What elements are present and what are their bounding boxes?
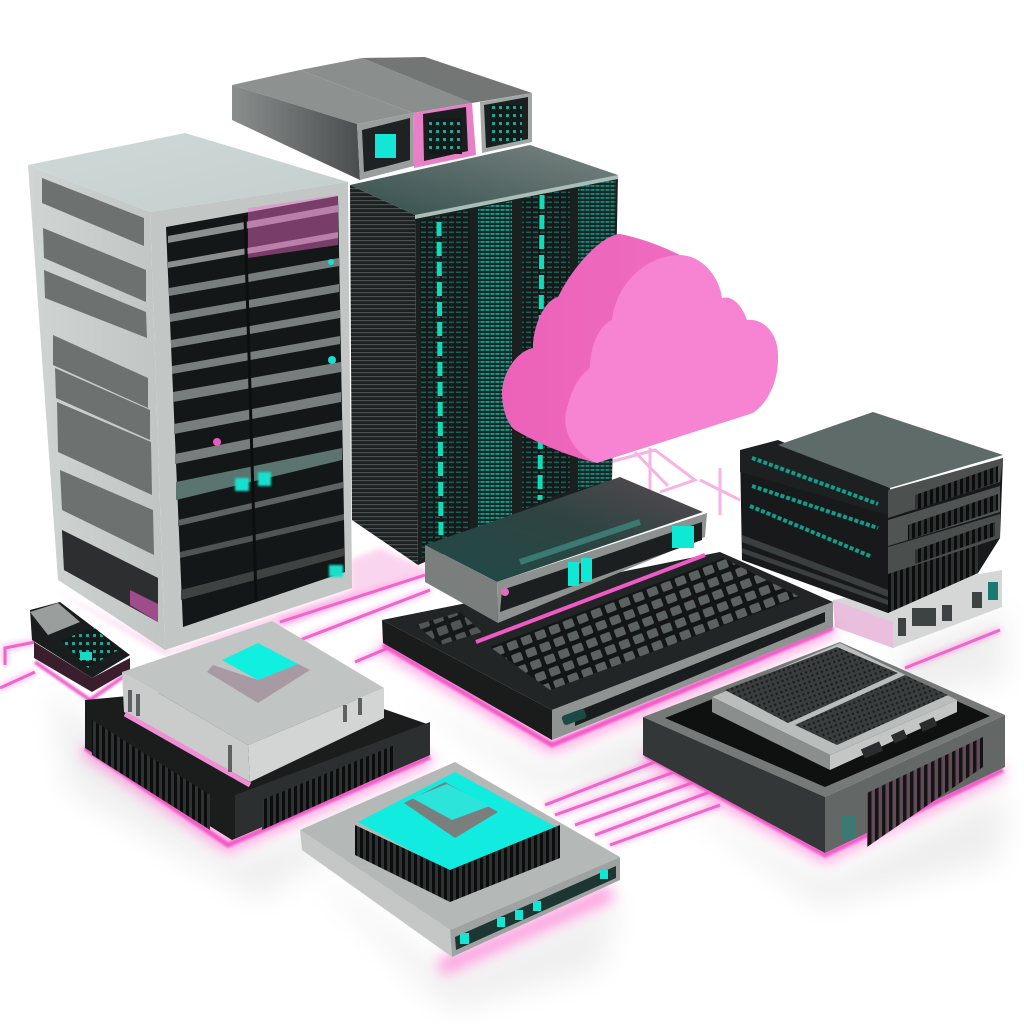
component: back tower rack with teal LEDs <box>350 145 618 565</box>
component: silver box on dark base <box>85 621 430 845</box>
component: central flat device <box>425 477 707 623</box>
cloud side extrusion <box>502 234 680 463</box>
component: small device far left <box>30 602 130 700</box>
component: stacked servers right <box>740 412 1003 648</box>
component: dark server right bottom <box>643 642 1005 855</box>
module 1 <box>232 70 414 180</box>
pink circuit lines on floor <box>0 448 1000 845</box>
module 2 <box>300 58 476 168</box>
component: pink cloud <box>502 234 778 463</box>
cloud front face <box>565 255 778 463</box>
component: silver board with teal chip <box>300 762 620 968</box>
floor reflections <box>50 610 1005 1010</box>
component: top server modules <box>232 57 532 180</box>
component: left silver rack <box>28 133 352 650</box>
right side dark server units <box>166 196 345 627</box>
module 3 <box>362 57 532 153</box>
component: keyboard base <box>382 552 833 745</box>
left side drive bays <box>42 178 158 622</box>
